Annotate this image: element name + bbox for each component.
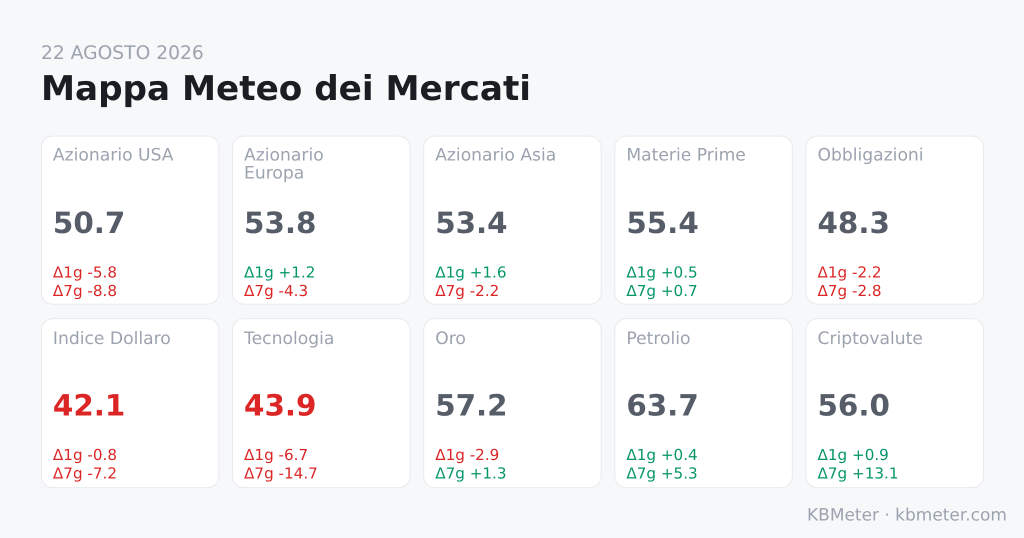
label: Petrolio — [626, 327, 691, 348]
label — [244, 144, 324, 183]
deltas: Δ7g -14.7 — [244, 465, 318, 483]
value: 42.1 — [53, 389, 125, 423]
value: 48.3 — [817, 206, 890, 240]
deltas: Δ7g -2.2 — [435, 282, 499, 300]
deltas: Δ1g -2.9 — [435, 446, 499, 464]
label: Oro — [435, 327, 466, 348]
deltas: Δ1g -6.7 — [244, 446, 308, 464]
panel: Oro — [423, 318, 602, 488]
label: Azionario Asia — [435, 144, 556, 165]
value: 55.4 — [626, 206, 699, 240]
deltas: Δ1g +0.5 — [626, 263, 698, 281]
label: Materie Prime — [626, 144, 746, 165]
deltas: Δ1g +0.9 — [817, 446, 889, 464]
panel: Petrolio — [614, 318, 793, 488]
deltas — [53, 446, 117, 483]
panel: Materie Prime — [614, 135, 793, 305]
label: Tecnologia — [244, 327, 334, 348]
value: 56.0 — [817, 389, 890, 423]
label: Azionario USA — [53, 144, 174, 165]
panel: Criptovalute — [806, 318, 984, 488]
deltas: Δ7g -2.8 — [817, 282, 882, 300]
panel: Azionario Europa — [232, 135, 410, 305]
panel: Obbligazioni — [806, 135, 984, 305]
panel: Tecnologia — [232, 318, 410, 488]
panel: Azionario USA — [41, 135, 219, 305]
value: 63.7 — [626, 389, 699, 423]
label: Europa — [244, 162, 304, 183]
deltas — [626, 446, 698, 483]
label: Azionario — [244, 144, 324, 165]
deltas: Δ1g -0.8 — [53, 446, 117, 464]
value: 53.4 — [435, 206, 508, 240]
deltas: Δ7g -8.8 — [53, 282, 117, 300]
value: 57.2 — [435, 389, 508, 423]
deltas: Δ1g -5.8 — [53, 263, 117, 281]
deltas: Δ7g +1.3 — [435, 465, 507, 483]
deltas — [435, 446, 507, 483]
deltas: Δ7g +13.1 — [817, 465, 898, 483]
value: 43.9 — [244, 389, 316, 423]
date: 22 AGOSTO 2026 — [41, 43, 204, 64]
deltas: Δ1g +0.4 — [626, 446, 698, 464]
deltas — [817, 446, 898, 483]
deltas — [626, 263, 698, 300]
value: 53.8 — [244, 206, 316, 240]
deltas — [435, 263, 507, 300]
label: Criptovalute — [817, 327, 923, 348]
deltas — [53, 263, 117, 300]
deltas: Δ1g +1.6 — [435, 263, 507, 281]
panel: Indice Dollaro — [41, 318, 219, 488]
label: Indice Dollaro — [53, 327, 171, 348]
footer: KBMeter · kbmeter.com — [807, 505, 1007, 524]
deltas — [817, 263, 882, 300]
title: Mappa Meteo dei Mercati — [41, 69, 531, 108]
deltas: Δ7g +5.3 — [626, 465, 698, 483]
deltas — [244, 446, 318, 483]
deltas: Δ1g -2.2 — [817, 263, 882, 281]
deltas: Δ7g -4.3 — [244, 282, 308, 300]
label: Obbligazioni — [817, 144, 924, 165]
value: 50.7 — [53, 206, 125, 240]
panel: Azionario Asia — [423, 135, 602, 305]
deltas: Δ7g +0.7 — [626, 282, 698, 300]
deltas — [244, 263, 315, 300]
deltas: Δ7g -7.2 — [53, 465, 117, 483]
deltas: Δ1g +1.2 — [244, 263, 315, 281]
